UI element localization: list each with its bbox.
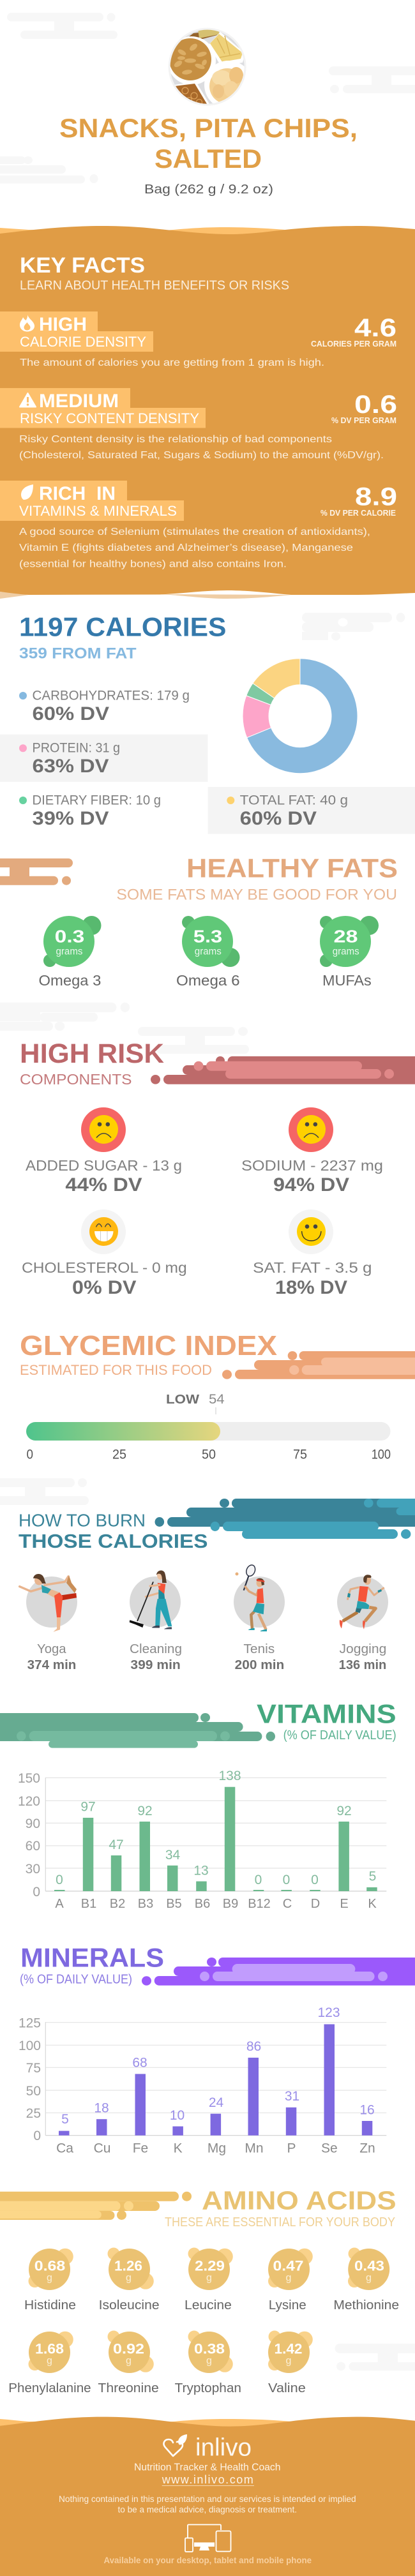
legend: total fat: 60% DV <box>240 808 317 829</box>
amino: tryptophan <box>175 2331 241 2395</box>
serving size: Bag (262 g / 9.2 oz) <box>144 183 273 197</box>
stat: omega 3 <box>38 916 101 989</box>
panel: footer <box>0 2417 415 2576</box>
bar chart: vitamins: 92 <box>137 1804 153 1818</box>
food photo <box>169 28 246 106</box>
amino: methionine: 0.43 <box>354 2258 384 2273</box>
glycemic index gauge: 100 <box>372 1448 391 1462</box>
bar chart: minerals: P <box>287 2141 296 2156</box>
fact: medium risky content density: MEDIUM <box>39 391 119 412</box>
bar chart: vitamins: 5 <box>369 1869 376 1884</box>
bar chart: vitamins: 92 <box>336 1804 352 1818</box>
key facts subheading: LEARN ABOUT HEALTH BENEFITS OR RISKS <box>20 278 289 292</box>
disclaimer <box>59 2494 356 2515</box>
amino: lysine: g <box>286 2273 291 2284</box>
calories heading: 1197 CALORIES <box>19 612 226 642</box>
fact: high calorie density: HIGH <box>39 314 87 335</box>
amino: leucine: Leucine <box>185 2298 232 2312</box>
legend: protein: PROTEIN: 31 g <box>32 741 120 756</box>
bar chart: minerals: 86 <box>246 2039 261 2054</box>
glycemic index gauge: LOW <box>166 1393 199 1407</box>
fact: rich in vitamins and minerals: % DV PER CALORIE <box>321 508 396 518</box>
icon: grinning face <box>81 1209 126 1254</box>
tagline: Nutrition Tracker & Health Coach <box>134 2462 281 2473</box>
glycemic index gauge: 54 <box>209 1392 225 1407</box>
glycemic deco bars <box>222 1351 415 1379</box>
risk: saturated fat <box>253 1209 372 1298</box>
legend: total fat: TOTAL FAT: 40 g <box>240 793 348 808</box>
fact: rich in vitamins and minerals: A good source of Selenium (stimulates the creation of antioxidants), <box>19 527 370 537</box>
stat: omega 3: 0.3 <box>55 927 84 947</box>
activity: yoga <box>20 1574 77 1672</box>
amino: histidine: 0.68 <box>34 2258 65 2273</box>
bar chart: minerals: Zn <box>359 2141 375 2156</box>
stat: omega 3: Omega 3 <box>38 972 101 989</box>
legend: protein: 63% DV <box>32 756 109 777</box>
stat: mufas <box>320 916 379 989</box>
inlivo logo: inlivo <box>195 2434 252 2461</box>
burn heading: HOW TO BURN <box>19 1511 146 1531</box>
glycemic index gauge: 25 <box>112 1448 126 1462</box>
fact: rich in vitamins and minerals: RICH IN <box>39 483 116 504</box>
fact: high calorie density: CALORIE DENSITY <box>20 334 146 350</box>
amino: methionine: Methionine <box>333 2298 399 2312</box>
healthy fats subheading: SOME FATS MAY BE GOOD FOR YOU <box>116 886 397 903</box>
bar chart: vitamins: B2 <box>110 1897 125 1911</box>
fact: rich in vitamins and minerals: VITAMINS & MINERALS <box>19 503 177 519</box>
bar chart: vitamins: 0 <box>255 1873 262 1887</box>
amino: phenylalanine: 1.68 <box>35 2340 64 2356</box>
fact: medium risky content density: Risky Content density is the relationship of bad components <box>19 434 332 445</box>
bar chart: vitamins: 0 <box>56 1873 63 1887</box>
bar chart: minerals: 68 <box>132 2055 147 2071</box>
risk: saturated fat: SAT. FAT - 3.5 g <box>253 1259 372 1276</box>
title: SALTED <box>155 144 262 174</box>
fact: rich in vitamins and minerals: 8.9 <box>355 483 397 511</box>
website link: www.inlivo.com <box>162 2473 253 2486</box>
availability note: Available on your desktop, tablet and mobile phone <box>103 2555 312 2565</box>
stat: mufas: 28 <box>333 927 358 947</box>
amino: histidine: g <box>47 2273 52 2284</box>
fact: high calorie density <box>0 311 396 368</box>
bar chart: vitamins: 34 <box>165 1848 180 1862</box>
activity: jogging: Jogging <box>340 1642 386 1656</box>
title <box>59 113 358 174</box>
glycemic index gauge: 0 <box>27 1448 33 1462</box>
bar chart: minerals: 125 <box>19 2016 41 2031</box>
icon: warning triangle <box>20 393 36 407</box>
fact: medium risky content density: (Cholesterol, Saturated Fat, Sugars & Sodium) to the amount (%DV/gr). <box>19 450 384 461</box>
amino: leucine: g <box>206 2273 212 2284</box>
fact: medium risky content density <box>0 388 397 461</box>
icon: leaf <box>21 484 33 500</box>
bar chart: minerals: Cu <box>94 2141 110 2156</box>
panel: key facts <box>0 226 415 599</box>
donut chart <box>243 659 358 774</box>
bar chart: vitamins: 0 <box>311 1873 319 1887</box>
amino: isoleucine: 1.26 <box>114 2258 142 2273</box>
calories from fat: 359 FROM FAT <box>19 645 137 663</box>
vitamins subheading: (% OF DAILY VALUE) <box>283 1728 396 1742</box>
bar chart: minerals: 16 <box>359 2102 375 2118</box>
glycemic index heading: GLYCEMIC INDEX <box>20 1330 277 1361</box>
bar chart: vitamins: B9 <box>223 1897 238 1911</box>
glycemic index gauge: 50 <box>202 1448 216 1462</box>
stat: omega 6: grams <box>195 947 222 957</box>
risk: cholesterol: 0% DV <box>72 1277 137 1298</box>
stat: omega 3: grams <box>56 947 83 957</box>
minerals deco bars <box>142 1958 415 1986</box>
risk: cholesterol <box>22 1209 187 1298</box>
bar chart: vitamins: A <box>55 1897 64 1911</box>
fact: medium risky content density: RISKY CONTENT DENSITY <box>20 410 199 426</box>
amino: phenylalanine: g <box>47 2356 52 2367</box>
icon: heart with leaf <box>164 2434 187 2456</box>
amino: valine: 1.42 <box>275 2340 303 2356</box>
amino: lysine: Lysine <box>269 2298 306 2312</box>
bar chart: minerals: Se <box>321 2141 338 2156</box>
bar chart: vitamins: C <box>283 1897 292 1911</box>
bar chart: minerals: 50 <box>26 2084 41 2099</box>
bar chart: vitamins: D <box>311 1897 320 1911</box>
amino: phenylalanine: Phenylalanine <box>8 2381 91 2395</box>
bar chart: minerals: 100 <box>19 2039 41 2053</box>
amino: threonine: Threonine <box>98 2381 159 2395</box>
bar chart: vitamins: E <box>340 1897 349 1911</box>
fact: medium risky content density: % DV PER GRAM <box>331 416 396 425</box>
bar chart: vitamins: 30 <box>26 1862 40 1876</box>
icon: cleaning figure <box>130 1571 181 1629</box>
vitamins heading: VITAMINS <box>257 1699 396 1729</box>
bar chart: vitamins: 120 <box>18 1794 40 1809</box>
bar chart: vitamins: 138 <box>218 1769 241 1783</box>
bar chart: vitamins: 13 <box>193 1864 209 1878</box>
healthy fats heading: HEALTHY FATS <box>186 853 398 883</box>
inlivo logo <box>164 2434 252 2461</box>
bar chart: minerals: Mg <box>207 2141 226 2156</box>
amino: isoleucine <box>99 2248 160 2312</box>
fact: rich in vitamins and minerals: (essential for healthy bones) and also contains Iron. <box>19 559 287 569</box>
legend: carbohydrates: CARBOHYDRATES: 179 g <box>32 689 190 703</box>
bar chart: minerals: 75 <box>26 2061 41 2076</box>
activity: tennis <box>234 1564 285 1672</box>
disclaimer: to be a medical advice, diagnosis or treatment. <box>117 2505 297 2515</box>
high risk deco bars <box>151 1056 415 1084</box>
bar chart: minerals: Fe <box>133 2141 148 2156</box>
amino: methionine: g <box>366 2273 372 2284</box>
risk: sodium: SODIUM - 2237 mg <box>241 1157 383 1174</box>
amino: tryptophan: g <box>206 2356 212 2367</box>
burn deco bars <box>155 1499 415 1539</box>
risk: cholesterol: CHOLESTEROL - 0 mg <box>22 1259 187 1276</box>
icon: devices <box>185 2525 231 2552</box>
fact: high calorie density: 4.6 <box>354 314 396 342</box>
bar chart: vitamins: B12 <box>248 1897 271 1911</box>
legend: dietary fiber: DIETARY FIBER: 10 g <box>32 793 161 808</box>
risk: added sugar: ADDED SUGAR - 13 g <box>26 1157 182 1174</box>
bar chart: vitamins <box>18 1769 386 1911</box>
activity: cleaning <box>130 1571 182 1672</box>
bar chart: minerals: 10 <box>170 2108 185 2123</box>
bar chart: vitamins: 47 <box>109 1838 124 1852</box>
icon: jogging figure <box>337 1575 388 1629</box>
disclaimer: Nothing contained in this presentation and our services is intended or implied <box>59 2494 356 2504</box>
bar chart: vitamins: 150 <box>18 1771 40 1786</box>
bar chart: minerals: 0 <box>33 2129 41 2143</box>
amino: valine: Valine <box>268 2381 306 2395</box>
amino: phenylalanine <box>8 2332 91 2395</box>
burn heading: THOSE CALORIES <box>19 1530 208 1552</box>
bar chart: vitamins: B1 <box>81 1897 96 1911</box>
risk: saturated fat: 18% DV <box>275 1277 347 1298</box>
bar chart: minerals: 31 <box>285 2089 299 2104</box>
bar chart: minerals: 24 <box>209 2095 223 2110</box>
stat: omega 6: Omega 6 <box>176 972 240 989</box>
legend: dietary fiber: 39% DV <box>32 808 109 829</box>
activity: tennis: 200 min <box>235 1658 284 1672</box>
fact: rich in vitamins and minerals <box>0 481 397 569</box>
minerals heading: MINERALS <box>20 1943 164 1973</box>
bar chart: minerals: 5 <box>61 2112 69 2127</box>
risk: sodium <box>241 1107 383 1195</box>
bar chart: vitamins: K <box>368 1897 377 1911</box>
amino: threonine: g <box>126 2356 132 2367</box>
stat: omega 6: 5.3 <box>193 927 222 947</box>
stat: mufas: MUFAs <box>322 972 372 989</box>
amino: lysine <box>268 2249 313 2312</box>
amino acids heading: AMINO ACIDS <box>202 2186 396 2215</box>
burn heading <box>19 1511 208 1552</box>
amino acids subheading: THESE ARE ESSENTIAL FOR YOUR BODY <box>165 2215 395 2229</box>
legend: dietary fiber <box>19 793 161 829</box>
fact: medium risky content density: 0.6 <box>354 391 397 419</box>
legend: carbohydrates <box>19 689 190 724</box>
bar chart: minerals: 25 <box>26 2106 41 2121</box>
amino: threonine: 0.92 <box>113 2340 144 2356</box>
fact: rich in vitamins and minerals: Vitamin E (fights diabetes and Alzheimer’s disease), Manganese <box>19 543 353 553</box>
bar chart: vitamins: 60 <box>26 1839 40 1853</box>
icon: flame <box>20 315 34 332</box>
legend: protein <box>0 735 208 782</box>
stat: omega 6 <box>176 916 240 989</box>
legend: total fat <box>208 787 415 834</box>
activity: yoga: 374 min <box>27 1658 76 1672</box>
fact: high calorie density: CALORIES PER GRAM <box>311 339 396 348</box>
bar chart: minerals: Mn <box>245 2141 264 2156</box>
activity: jogging <box>337 1575 388 1672</box>
bar chart: vitamins: B6 <box>195 1897 210 1911</box>
high risk subheading: COMPONENTS <box>20 1071 132 1088</box>
risk: added sugar: 44% DV <box>65 1174 142 1195</box>
bar chart: vitamins: 0 <box>283 1873 290 1887</box>
amino: valine <box>268 2331 313 2395</box>
bar chart: vitamins: 0 <box>33 1885 40 1899</box>
bar chart: minerals: 18 <box>94 2101 109 2115</box>
activity: cleaning: Cleaning <box>130 1642 182 1656</box>
amino: valine: g <box>286 2356 291 2367</box>
amino: lysine: 0.47 <box>273 2258 304 2273</box>
fact: high calorie density: The amount of calories you are getting from 1 gram is high. <box>20 357 324 368</box>
bar chart: minerals: Ca <box>56 2141 73 2156</box>
amino acids deco bars <box>0 2192 192 2220</box>
legend: carbohydrates: 60% DV <box>32 703 109 724</box>
bar chart: vitamins: B3 <box>138 1897 153 1911</box>
activity: yoga: Yoga <box>37 1642 66 1656</box>
amino: leucine <box>185 2248 233 2312</box>
activity: tennis: Tenis <box>243 1642 275 1656</box>
bar chart: vitamins: 90 <box>26 1816 40 1831</box>
key facts heading: KEY FACTS <box>20 253 145 278</box>
activity: cleaning: 399 min <box>130 1658 181 1672</box>
amino: isoleucine: g <box>126 2273 132 2284</box>
icon: smiling face <box>289 1209 333 1254</box>
risk: added sugar <box>26 1107 182 1195</box>
amino: tryptophan: Tryptophan <box>175 2381 241 2395</box>
amino: tryptophan: 0.38 <box>194 2340 225 2356</box>
bar chart: minerals <box>19 2005 386 2156</box>
high risk heading: HIGH RISK <box>20 1038 164 1069</box>
icon: yoga figure <box>20 1574 77 1632</box>
bar chart: minerals: K <box>174 2141 183 2156</box>
icon: sad face <box>289 1107 333 1152</box>
title: SNACKS, PITA CHIPS, <box>59 113 358 143</box>
activity: jogging: 136 min <box>339 1658 386 1672</box>
glycemic index subheading: ESTIMATED FOR THIS FOOD <box>20 1362 212 1378</box>
bar chart: vitamins: B5 <box>166 1897 182 1911</box>
amino: leucine: 2.29 <box>195 2258 225 2273</box>
bar chart: minerals: 123 <box>317 2005 340 2020</box>
icon: tennis figure <box>234 1564 285 1631</box>
icon: sad face <box>81 1107 126 1152</box>
minerals subheading: (% OF DAILY VALUE) <box>20 1973 132 1987</box>
bar chart: vitamins: 97 <box>80 1800 96 1814</box>
amino: methionine <box>333 2248 399 2312</box>
amino: histidine <box>24 2249 76 2312</box>
risk: sodium: 94% DV <box>273 1174 349 1195</box>
amino: isoleucine: Isoleucine <box>99 2298 160 2312</box>
amino: histidine: Histidine <box>24 2298 76 2312</box>
glycemic index gauge <box>26 1392 391 1462</box>
vitamins deco bars <box>0 1713 275 1748</box>
amino: threonine <box>98 2331 159 2395</box>
glycemic index gauge: 75 <box>293 1448 307 1462</box>
stat: mufas: grams <box>333 947 359 957</box>
